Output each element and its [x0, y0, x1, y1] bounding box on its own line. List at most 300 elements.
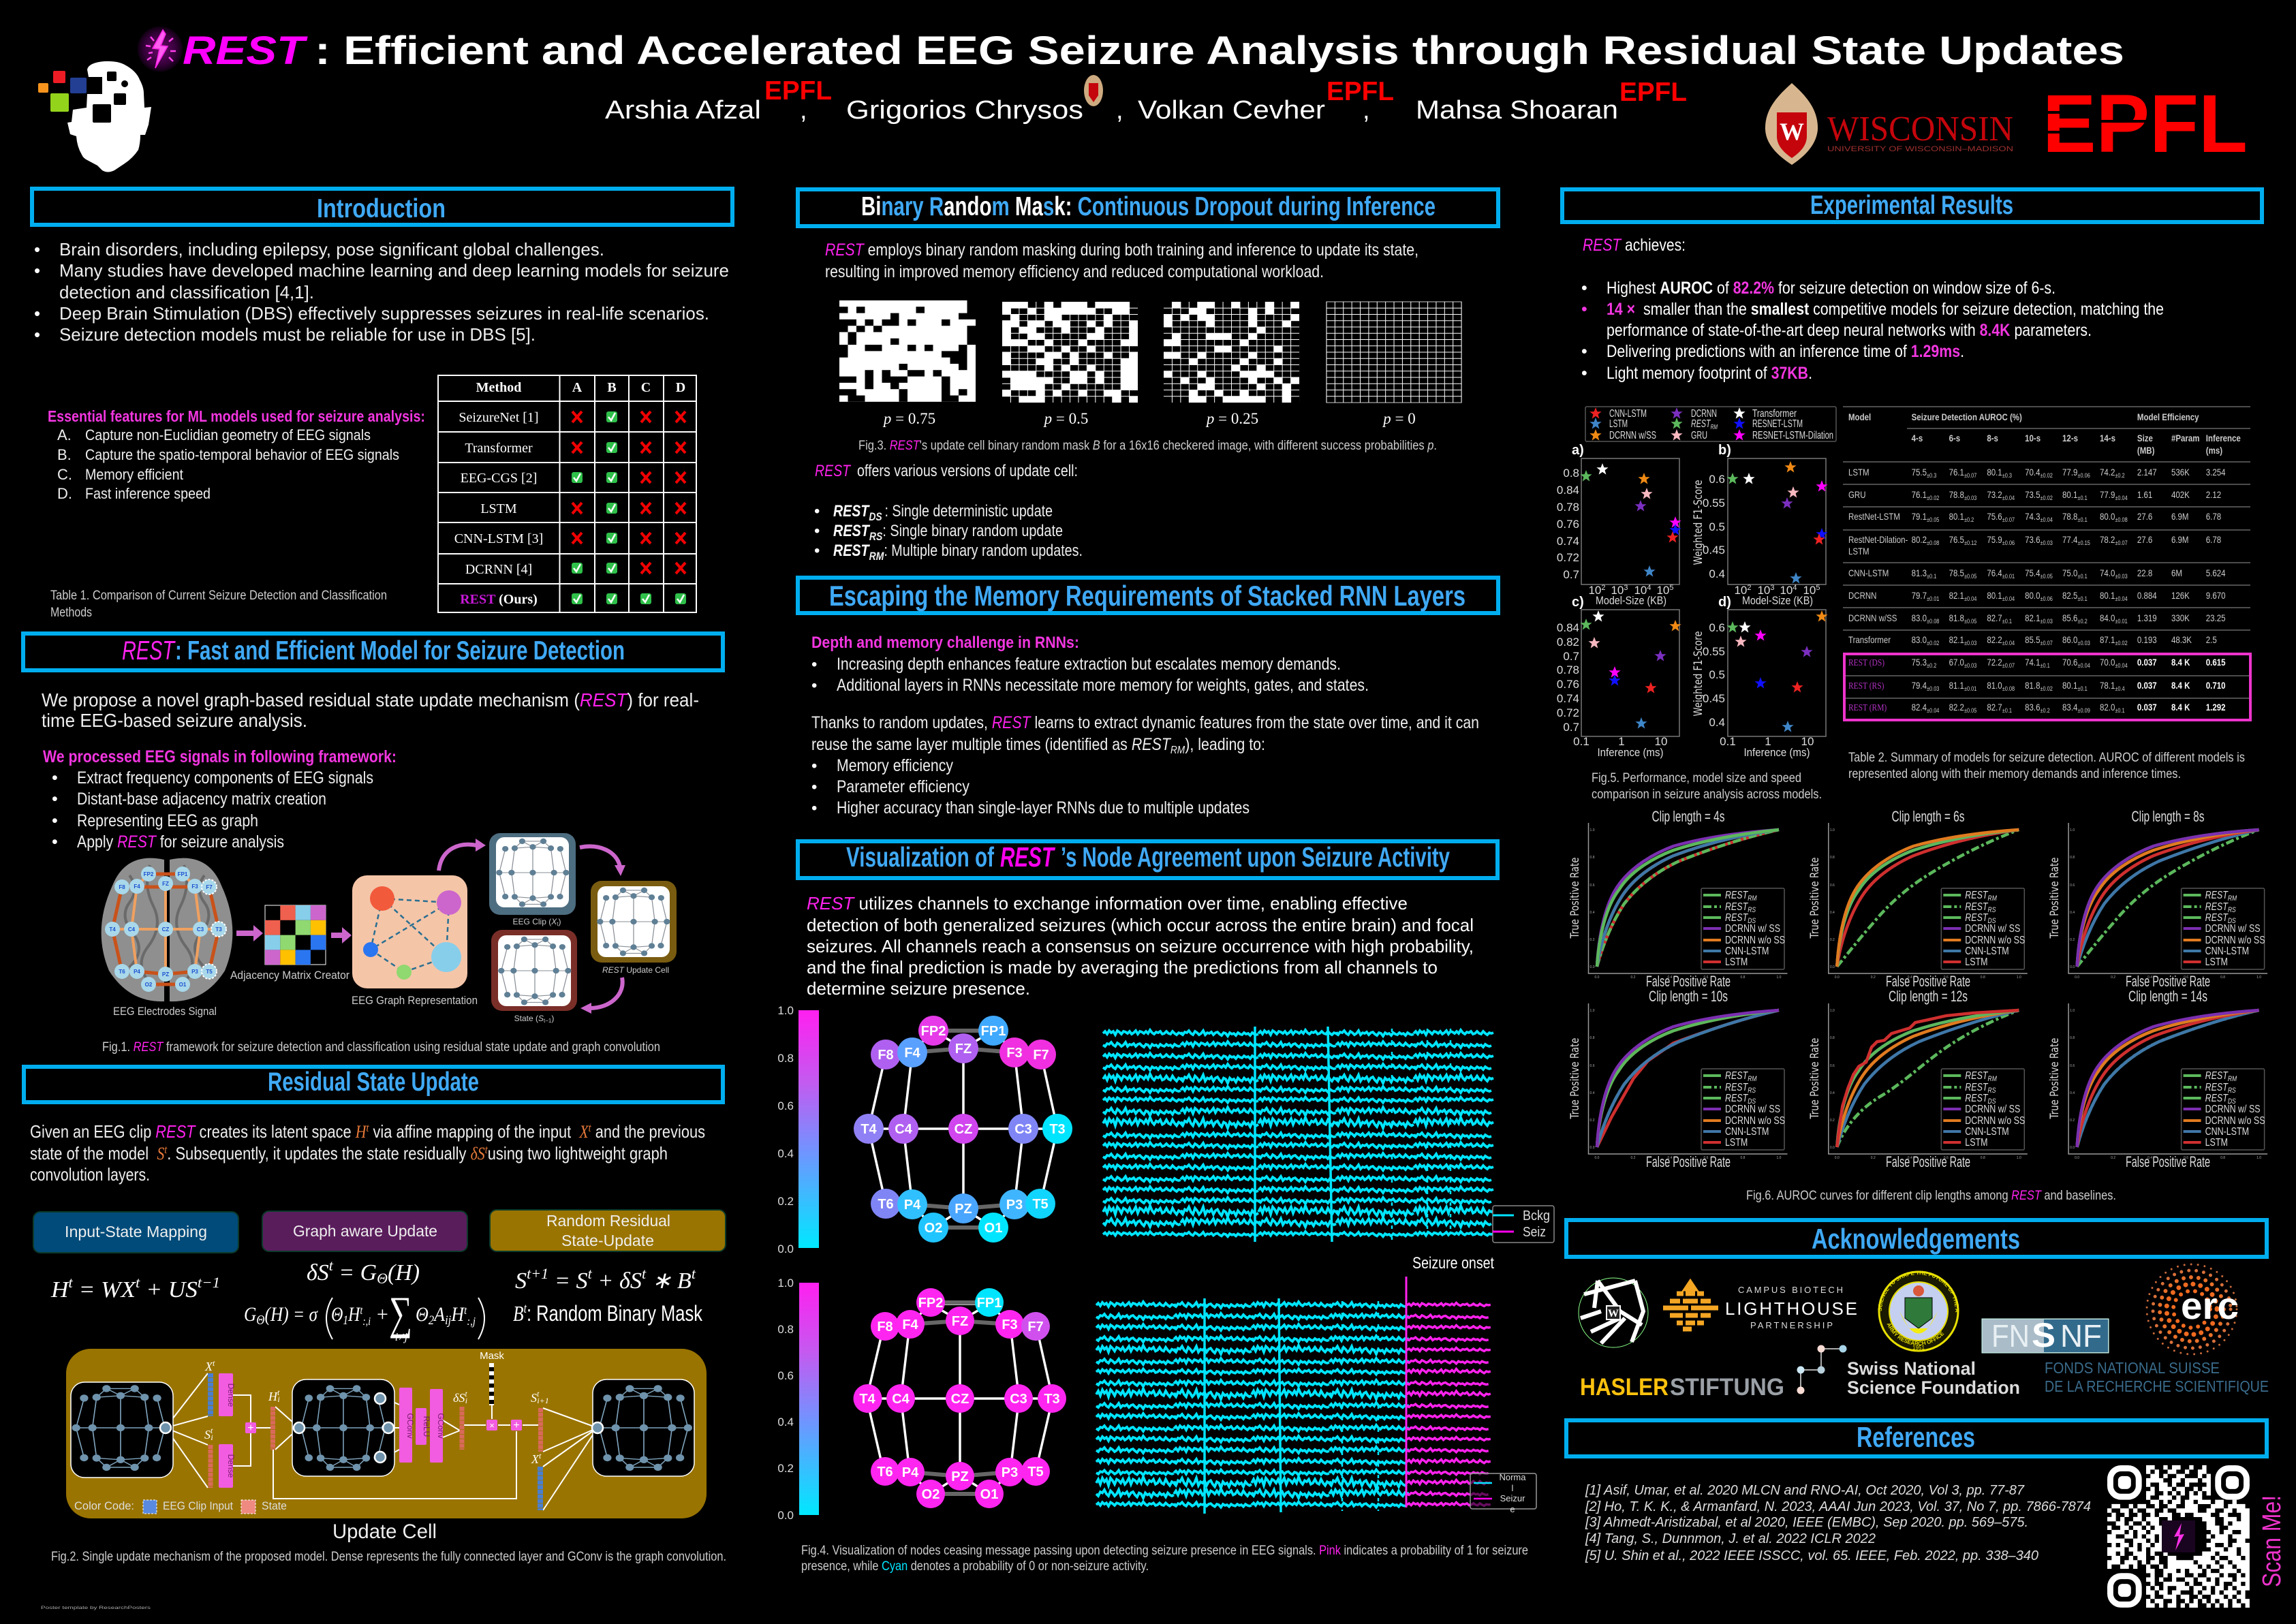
chart: clip length 4s: REST — [1725, 912, 1748, 924]
table 2: model summary: REST (RM) — [1848, 702, 1887, 713]
icon: brain with electrodes: PZ — [162, 971, 169, 978]
text: update cell versions: REST — [833, 522, 871, 540]
text: masking description: resulting in improved memory efficiency and reduced computational workload. — [825, 262, 1324, 281]
equation: latent mapping: = WX — [73, 1277, 136, 1302]
table 2: model summary: 27.6 — [2137, 511, 2152, 522]
legend: figure 5 models: CNN-LSTM — [1609, 408, 1647, 420]
table 2: model summary: LSTM — [1848, 467, 1870, 478]
logo: neural web circle — [1579, 1278, 1648, 1347]
chart b: F1 vs model size: 0.45 — [1703, 544, 1725, 557]
table 1: method comparison: EEG-CGS [2] — [461, 471, 537, 486]
equation: state update: S — [515, 1268, 527, 1294]
chart c: AUROC vs inference: 0.82 — [1557, 636, 1579, 649]
heading: acknowledgements — [1566, 1220, 2267, 1257]
equation: state update: + δS — [592, 1268, 642, 1294]
icon: brain with electrodes: T3 — [215, 926, 222, 933]
table 2: model summary: 78.5 — [1949, 567, 1964, 578]
colorbar: bottom — [777, 1277, 819, 1522]
mask p=0.5 — [1002, 302, 1138, 403]
logo: Fonds national suisse: FONDS NATIONAL SUISSE — [2045, 1359, 2220, 1377]
caption: figure 5: comparison in seizure analysis across models. — [1592, 787, 1822, 802]
chart: clip length 10s: RM — [1748, 1075, 1757, 1083]
chart b: F1 vs model size: 10 — [1803, 584, 1816, 597]
authors — [605, 76, 1687, 125]
table 2: model summary: ±0.04 — [2002, 595, 2015, 602]
table 2: model summary: ±0.07 — [2002, 662, 2015, 669]
table 2: model summary: ±0.07 — [2040, 640, 2053, 646]
table 1: method comparison: Method — [476, 380, 521, 395]
symbol labels: Mask — [480, 1350, 504, 1362]
graph: background node probabilities: T3 — [1049, 1122, 1066, 1137]
panel: memory requirements — [798, 578, 1498, 817]
chart b: F1 vs model size: 0.6 — [1709, 473, 1725, 486]
chart d: F1 vs inference: 0.5 — [1709, 668, 1725, 681]
panel: experimental results — [1557, 189, 2267, 1203]
caption: figure 5 — [1592, 771, 1822, 802]
table 2: model summary: ±0.06 — [2040, 595, 2053, 602]
table 2: model summary: 8.4 K — [2171, 657, 2190, 668]
table 2: model summary: 76.5 — [1949, 534, 1964, 545]
heading: Introduction — [32, 189, 732, 225]
table 2: model summary: 5.624 — [2206, 567, 2226, 578]
box: input-state mapping: Input-State Mapping — [65, 1223, 207, 1240]
chart d: F1 vs inference: d) — [1718, 595, 1731, 610]
text: essential features: C. — [57, 466, 72, 483]
chart: clip length 10s: REST — [1725, 1082, 1748, 1093]
graph card: aggregation — [292, 1379, 394, 1476]
card: state: t−1 — [544, 1018, 552, 1024]
table 2: model summary: 80.1 — [2062, 489, 2077, 500]
chart b: F1 vs model size: 3 — [1770, 584, 1775, 592]
text: random updates benefits: • — [811, 799, 817, 817]
box: graph aware update — [262, 1211, 467, 1251]
chart d: F1 vs inference: 1 — [1765, 735, 1771, 748]
text: reference list: [1] Asif, Umar, et al. 2020 MLCN and RNO-AI, Oct 2020, Vol 3, pp. 77-87 — [1585, 1483, 2025, 1498]
table 2: model summary: 82.5 — [2062, 590, 2077, 601]
chart b: F1 vs model size: 0.5 — [1709, 520, 1725, 533]
table 2: model summary: ±0.08 — [1927, 540, 1940, 546]
chart a: AUROC vs model size: Model-Size (KB) — [1596, 594, 1666, 607]
graph: background node probabilities: FP1 — [981, 1024, 1006, 1039]
icon: brain with electrodes: F8 — [119, 884, 125, 890]
colorbar: bottom: 0.2 — [777, 1462, 794, 1475]
chart a: AUROC vs model size: 10 — [1634, 584, 1647, 597]
text: REST achievements: Light memory footprint of 37KB. — [1607, 364, 1812, 383]
graph: seizure node probabilities: T5 — [1027, 1465, 1044, 1480]
equation: state update: ∗ B — [646, 1268, 692, 1294]
icon: brain with electrodes: F4 — [134, 884, 140, 890]
chart a: AUROC vs model size: 2 — [1601, 584, 1606, 592]
text: update cell versions: REST — [833, 542, 871, 560]
chart: clip length 8s: DCRNN w/o SS — [2205, 935, 2265, 946]
equation: graph convolution: :,j — [467, 1315, 476, 1328]
mask labels: p = 0.75 — [882, 410, 935, 427]
graph: seizure node probabilities: F7 — [1027, 1320, 1044, 1334]
card: EEG clip: EEG Clip (X — [513, 917, 557, 926]
input and state vectors — [211, 1373, 541, 1510]
table 2: model summary: 9.670 — [2206, 590, 2226, 601]
table 2: model summary: 2.5 — [2206, 634, 2217, 645]
table 2: model summary: ±0.09 — [2077, 707, 2090, 714]
table 2: model summary: #Param — [2171, 433, 2199, 443]
legend: color code: EEG Clip Input — [163, 1499, 233, 1512]
table 2: model summary: 87.1 — [2100, 634, 2115, 645]
chart: clip length 4s: LSTM — [1725, 956, 1748, 968]
legend: figure 5 models: GRU — [1691, 430, 1707, 441]
symbol labels: δS — [453, 1391, 465, 1405]
authors: Arshia Afzal — [605, 96, 761, 125]
table 2: model summary: ±0.2 — [1964, 516, 1974, 523]
logo: Swiss National Science Foundation — [1797, 1345, 2020, 1398]
table 2: model summary: 81.1 — [1949, 680, 1964, 691]
chart b: F1 vs model size: 10 — [1757, 584, 1770, 597]
heading: visualization of node agreement: Visualization of — [846, 841, 994, 873]
chart a: AUROC vs model size: 0.84 — [1557, 484, 1579, 497]
chart: clip length 10s: False Positive Rate — [1646, 1153, 1731, 1170]
chart: clip length 12s: DCRNN w/ SS — [1965, 1104, 2020, 1115]
table 2: model summary: 6M — [2171, 567, 2182, 578]
table 2: model summary: ±0.04 — [2115, 595, 2128, 602]
heading: acknowledgements: Acknowledgements — [1812, 1223, 2020, 1255]
equation: graph convolution: t — [360, 1304, 363, 1317]
table 2: model summary: 81.0 — [1987, 680, 2002, 691]
chart: clip length 6s: RM — [1988, 894, 1998, 903]
symbol labels: i — [277, 1394, 280, 1404]
chart: clip length 8s: REST — [2205, 912, 2228, 924]
mask labels: p = 0.5 — [1043, 410, 1088, 427]
header banner — [38, 27, 2248, 172]
chart: clip length 10s: REST — [1725, 1070, 1748, 1082]
chart a: AUROC vs model size — [1557, 443, 1681, 607]
chart: clip length 8s: CNN-LSTM — [2205, 946, 2249, 957]
logo: army research office seal: ARMY RESEARCH OFFICE — [1887, 1324, 1944, 1345]
chart: clip length 4s: RM — [1748, 894, 1757, 903]
graph: seizure node probabilities: F8 — [877, 1320, 893, 1334]
colorbar: bottom: 0.6 — [777, 1369, 794, 1382]
equation: graph convolution: 2 — [429, 1313, 435, 1328]
chart a: AUROC vs model size: 0.74 — [1557, 535, 1579, 548]
table 2: model summary: 77.9 — [2062, 467, 2077, 478]
logo: campus biotech lighthouse: CAMPUS BIOTECH — [1738, 1285, 1843, 1295]
chart c: AUROC vs inference: 0.7 — [1563, 721, 1579, 734]
heading: visualization of node agreement: ’s Node Agreement upon Seizure Activity — [1061, 841, 1450, 873]
panel: residual state update — [24, 1067, 726, 1610]
graph: seizure node probabilities: F3 — [1002, 1317, 1018, 1332]
text: random binary mask: t — [524, 1301, 527, 1316]
text: update cell versions: • — [814, 502, 820, 520]
table 2: model summary: 73.2 — [1987, 489, 2002, 500]
heading: references: References — [1857, 1421, 1975, 1453]
text: depth and memory challenge: Depth and memory challenge in RNNs: — [811, 634, 1079, 652]
logo: ERC — [2147, 1264, 2239, 1354]
text: REST achievements: REST achieves: — [1583, 236, 1686, 255]
logo: EPFL: EPFL — [2043, 77, 2248, 170]
label: adjacency matrix creator: Adjacency Matrix Creator — [230, 969, 350, 982]
graph: seizure node probabilities: T4 — [859, 1392, 876, 1407]
table 2: model summary: 82.2 — [1987, 634, 2002, 645]
table 2: model summary: ±0.04 — [2002, 640, 2015, 646]
heading: experimental results: Experimental Results — [1810, 191, 2013, 220]
chart c: AUROC vs inference — [1557, 595, 1681, 759]
table 2: model summary: 2.12 — [2206, 489, 2221, 500]
chart a: AUROC vs model size: a) — [1572, 443, 1584, 458]
chart a: AUROC vs model size: 4 — [1647, 584, 1651, 592]
logo: FNSNF: NF — [2060, 1318, 2102, 1354]
equation: graph convolution: 1 — [343, 1313, 348, 1328]
table 2: model summary: (MB) — [2137, 445, 2154, 456]
authors: EPFL — [764, 76, 832, 106]
equation: state update: t — [642, 1265, 647, 1282]
dense layers: Dense — [226, 1384, 236, 1407]
table 2: model summary: 75.5 — [1912, 467, 1927, 478]
table 2: model summary: ±0.01 — [2115, 618, 2128, 625]
legend: background: Bckg — [1523, 1208, 1550, 1223]
graph: background node probabilities: P3 — [1006, 1198, 1023, 1213]
table 2: model summary: ±0.1 — [2077, 516, 2088, 523]
table 2: model summary: Transformer — [1848, 634, 1891, 645]
text: introduction bullets — [34, 239, 729, 345]
chart: clip length 10s: Clip length = 10s — [1649, 988, 1728, 1005]
chart a: AUROC vs model size: 0.7 — [1563, 568, 1579, 581]
table 1: method comparison: REST (Ours) — [460, 592, 538, 607]
arrow: clip to update cell — [580, 846, 625, 876]
logo: campus biotech lighthouse: PARTNERSHIP — [1750, 1320, 1833, 1330]
symbol labels — [204, 1350, 549, 1466]
table 2: model summary: 80.0 — [2025, 590, 2040, 601]
card: REST update cell — [591, 881, 677, 975]
legend: background — [1493, 1206, 1554, 1243]
colorbar: top: 0.8 — [777, 1052, 794, 1065]
table 2: model summary: 77.9 — [2100, 489, 2115, 500]
table 2: model summary: ±0.01 — [2002, 573, 2015, 580]
table 1: method comparison: C — [641, 380, 651, 395]
table 2: model summary: GRU — [1848, 489, 1866, 500]
text: update cell versions: RS — [869, 530, 883, 543]
legend: seizure: Norma — [1499, 1472, 1526, 1482]
icon: brain with electrodes: F7 — [206, 884, 213, 890]
chart: clip length 10s: LSTM — [1725, 1137, 1748, 1149]
chart: clip length 10s: DS — [1748, 1097, 1756, 1106]
text: residual description: convolution layers. — [30, 1164, 150, 1185]
graph: seizure node probabilities: T3 — [1044, 1392, 1060, 1407]
graph: seizure node probabilities: C3 — [1010, 1392, 1027, 1407]
symbol labels: S — [204, 1428, 211, 1441]
chart: clip length 8s: RM — [2228, 894, 2237, 903]
text: residual description: and the previous — [591, 1121, 705, 1142]
table 2: model summary: ±0.06 — [2002, 540, 2015, 546]
table 2: model summary: 1.292 — [2206, 702, 2226, 713]
chart d: F1 vs inference: 0.1 — [1720, 735, 1736, 748]
table 2: model summary: 70.6 — [2062, 657, 2077, 668]
table 2: model summary: 77.4 — [2062, 534, 2077, 545]
text: REST achievements: Delivering predictions with an inference time of 1.29ms. — [1607, 342, 1964, 361]
chart d: F1 vs inference: 0.6 — [1709, 621, 1725, 634]
chart: clip length 4s: REST — [1725, 901, 1748, 913]
icon: brain with electrodes: P3 — [191, 969, 198, 975]
colorbar: top: 0.2 — [777, 1195, 794, 1208]
table 2: model summary: 0.615 — [2206, 657, 2226, 668]
chart a: AUROC vs model size: 0.72 — [1557, 551, 1579, 564]
table 2: model summary: 86.0 — [2062, 634, 2077, 645]
graph: seizure node probabilities: CZ — [951, 1392, 969, 1407]
text: update cell versions: • — [814, 522, 820, 540]
caption: table 1: Table 1. Comparison of Current Seizure Detection and Classification — [50, 589, 387, 603]
table 2: model summary: LSTM — [1848, 546, 1870, 557]
graph: background node probabilities: O2 — [925, 1221, 942, 1236]
table 2: model summary: ±0.02 — [1927, 495, 1940, 501]
heading: REST fast and efficient model: : Fast and Efficient Model for Seizure Detection — [175, 636, 625, 666]
arrow: graph to clip — [439, 839, 486, 871]
icon: head logo — [38, 61, 151, 172]
card: REST update cell: REST Update Cell — [602, 965, 669, 975]
text: depth and memory challenge: Additional layers in RNNs necessitate more memory for weights, gates, and states. — [837, 676, 1369, 695]
symbol labels: X — [531, 1452, 539, 1466]
mask p=0.25 — [1164, 302, 1299, 403]
text: essential features: Fast inference speed — [85, 485, 211, 502]
text: update cell versions: RM — [869, 550, 884, 563]
mask p=0 — [1327, 302, 1461, 403]
chart b: F1 vs model size: 5 — [1816, 584, 1820, 592]
equation: graph convolution: t — [464, 1304, 467, 1317]
table 2: model summary: 67.0 — [1949, 657, 1964, 668]
chart: clip length 6s: CNN-LSTM — [1965, 946, 2009, 957]
table 2: model summary: 79.1 — [1912, 511, 1927, 522]
chart: clip length 12s: DS — [1988, 1097, 1996, 1106]
logo: Hasler Stiftung: HASLER — [1580, 1374, 1669, 1401]
chart d: F1 vs inference — [1692, 595, 1828, 759]
chart: clip length 6s: REST — [1965, 912, 1988, 924]
authors: Volkan Cevher — [1138, 96, 1325, 125]
text: introduction bullets: Seizure detection models must be reliable for use in DBS [5]. — [59, 324, 536, 345]
legend: figure 5 models: DCRNN w/SS — [1609, 430, 1656, 441]
symbol labels: t — [539, 1451, 542, 1461]
table 2: model summary: ±0.1 — [2002, 618, 2012, 625]
symbol labels: S — [531, 1391, 537, 1405]
graph: seizure node probabilities: O1 — [980, 1487, 998, 1502]
text: essential features: D. — [57, 485, 72, 502]
caption: figure 4: Fig.4. Visualization of nodes ceasing message passing upon detecting seizure presence in EEG signals. Pink indicates a probability of 1 for seizure — [801, 1544, 1528, 1558]
box: random residual state-update: State-Update — [561, 1232, 654, 1249]
legend: seizure: l — [1512, 1483, 1514, 1493]
equation: state delta: t — [329, 1257, 334, 1274]
legend: color code — [74, 1499, 287, 1514]
logo: Wisconsin: WISCONSIN — [1827, 110, 2013, 149]
chart: clip length 4s: DCRNN w/ SS — [1725, 923, 1780, 935]
logo: Wisconsin — [1765, 83, 2013, 165]
table 2: model summary: ±0.03 — [1964, 640, 1977, 646]
panel: references — [1566, 1420, 2286, 1606]
graph: seizure node probabilities: FP2 — [918, 1296, 943, 1311]
chart a: AUROC vs model size: 5 — [1669, 584, 1674, 592]
label: update cell: Update Cell — [332, 1520, 437, 1543]
chart: clip length 12s: CNN-LSTM — [1965, 1126, 2009, 1138]
chart: clip length 6s: True Positive Rate — [1808, 857, 1822, 939]
text: random updates benefits: ), leading to: — [1185, 735, 1265, 754]
graph card: input — [71, 1382, 173, 1478]
graph convolution layers: GConv — [436, 1413, 446, 1439]
chart: seizure EEG traces — [1096, 1277, 1491, 1514]
table 2: model summary: ±0.08 — [2115, 516, 2128, 523]
text: introduction bullets: • — [34, 239, 40, 260]
text: visualization description: and the final prediction is made by averaging the predictions from all channels to — [807, 957, 1438, 978]
icon: REST spark — [138, 27, 183, 72]
table 2: model summary: 78.8 — [1949, 489, 1964, 500]
table 2: model summary: 79.7 — [1912, 590, 1927, 601]
chart: clip length 6s: RS — [1988, 906, 1996, 914]
logo: Fonds national suisse — [2045, 1359, 2269, 1395]
chart: clip length 14s: REST — [2205, 1070, 2228, 1082]
figure 3: random masks — [839, 300, 1461, 427]
box: graph aware update: Graph aware Update — [293, 1222, 437, 1240]
table 2: model summary: 74.3 — [2025, 511, 2040, 522]
table 2: model summary: 78.8 — [2062, 511, 2077, 522]
text: update cell versions: REST — [833, 502, 870, 520]
colorbar: top: 0.6 — [777, 1099, 794, 1112]
authors: , — [1363, 96, 1370, 125]
text: introduction bullets: Many studies have developed machine learning and deep learning models for seizure — [59, 260, 729, 281]
chart b: F1 vs model size: 0.55 — [1703, 497, 1725, 510]
text: introduction bullets: Brain disorders, including epilepsy, pose significant global challenges. — [59, 239, 604, 260]
logo: campus biotech lighthouse — [1663, 1283, 1857, 1330]
text: residual description: t — [589, 1121, 592, 1134]
card: EEG clip: ) — [558, 917, 561, 926]
graph: background node probabilities: PZ — [955, 1202, 972, 1217]
chart: clip length 12s: LSTM — [1965, 1137, 1988, 1149]
symbol labels: H — [268, 1390, 277, 1403]
chart: clip length 4s: RS — [1748, 906, 1756, 914]
table 2: model summary: ±0.1 — [2077, 573, 2088, 580]
operators: × — [489, 1420, 495, 1431]
operators: + — [513, 1420, 520, 1431]
text: random updates benefits: • — [811, 757, 817, 775]
chart c: AUROC vs inference: 1 — [1618, 735, 1625, 748]
operators — [245, 1420, 522, 1434]
dense layers: Dense — [226, 1454, 236, 1478]
graph: seizure node probabilities: O2 — [922, 1487, 940, 1502]
table 2: model summary: 70.0 — [2100, 657, 2115, 668]
chart a: AUROC vs model size: 0.76 — [1557, 518, 1579, 531]
table 2: model summary: ±0.05 — [1964, 573, 1977, 580]
text: introduction bullets: • — [34, 260, 40, 281]
symbol labels: t — [537, 1389, 540, 1399]
table 2: model summary: ±0.03 — [2040, 540, 2053, 546]
authors: , — [800, 96, 807, 125]
table 2: model summary: ±0.08 — [1927, 618, 1940, 625]
text: random updates benefits: Parameter efficiency — [837, 777, 969, 796]
text: residual description: t — [366, 1121, 370, 1134]
table 2: model summary: 80.1 — [1987, 467, 2002, 478]
icon: brain with electrodes — [102, 858, 232, 1001]
heading: REST fast and efficient model: REST — [122, 636, 176, 666]
table 2: model summary: 79.4 — [1912, 680, 1927, 691]
text: essential features: Essential features for ML models used for seizure analysis: — [48, 407, 425, 425]
table 2: model summary: ±0.04 — [2115, 662, 2128, 669]
text: reference list: [2] Ho, T. K. K., & Armanfard, N. 2023, AAAI Jun 2023, Vol. 37, No 7, pp. 7866-7874 — [1585, 1499, 2091, 1514]
box: random residual state-update — [490, 1210, 726, 1251]
chart: clip length 10s: DCRNN w/o SS — [1725, 1115, 1785, 1127]
caption: table 2: Table 2. Summary of models for seizure detection. AUROC of different models is — [1848, 751, 2245, 765]
arrow: matrix to graph — [331, 927, 352, 943]
text: proposal — [42, 689, 699, 731]
table 2: model summary: REST (DS) — [1848, 657, 1884, 668]
title: : Efficient and Accelerated EEG Seizure Analysis through Residual State Updates — [315, 29, 2124, 73]
graph: seizure node probabilities — [853, 1288, 1066, 1508]
table 2: model summary: 75.9 — [1987, 534, 2002, 545]
text: essential features: B. — [57, 446, 72, 463]
chart c: AUROC vs inference: 10 — [1655, 735, 1667, 748]
equation: state delta: Θ — [377, 1270, 388, 1287]
text: update cell versions: DS — [869, 510, 885, 523]
